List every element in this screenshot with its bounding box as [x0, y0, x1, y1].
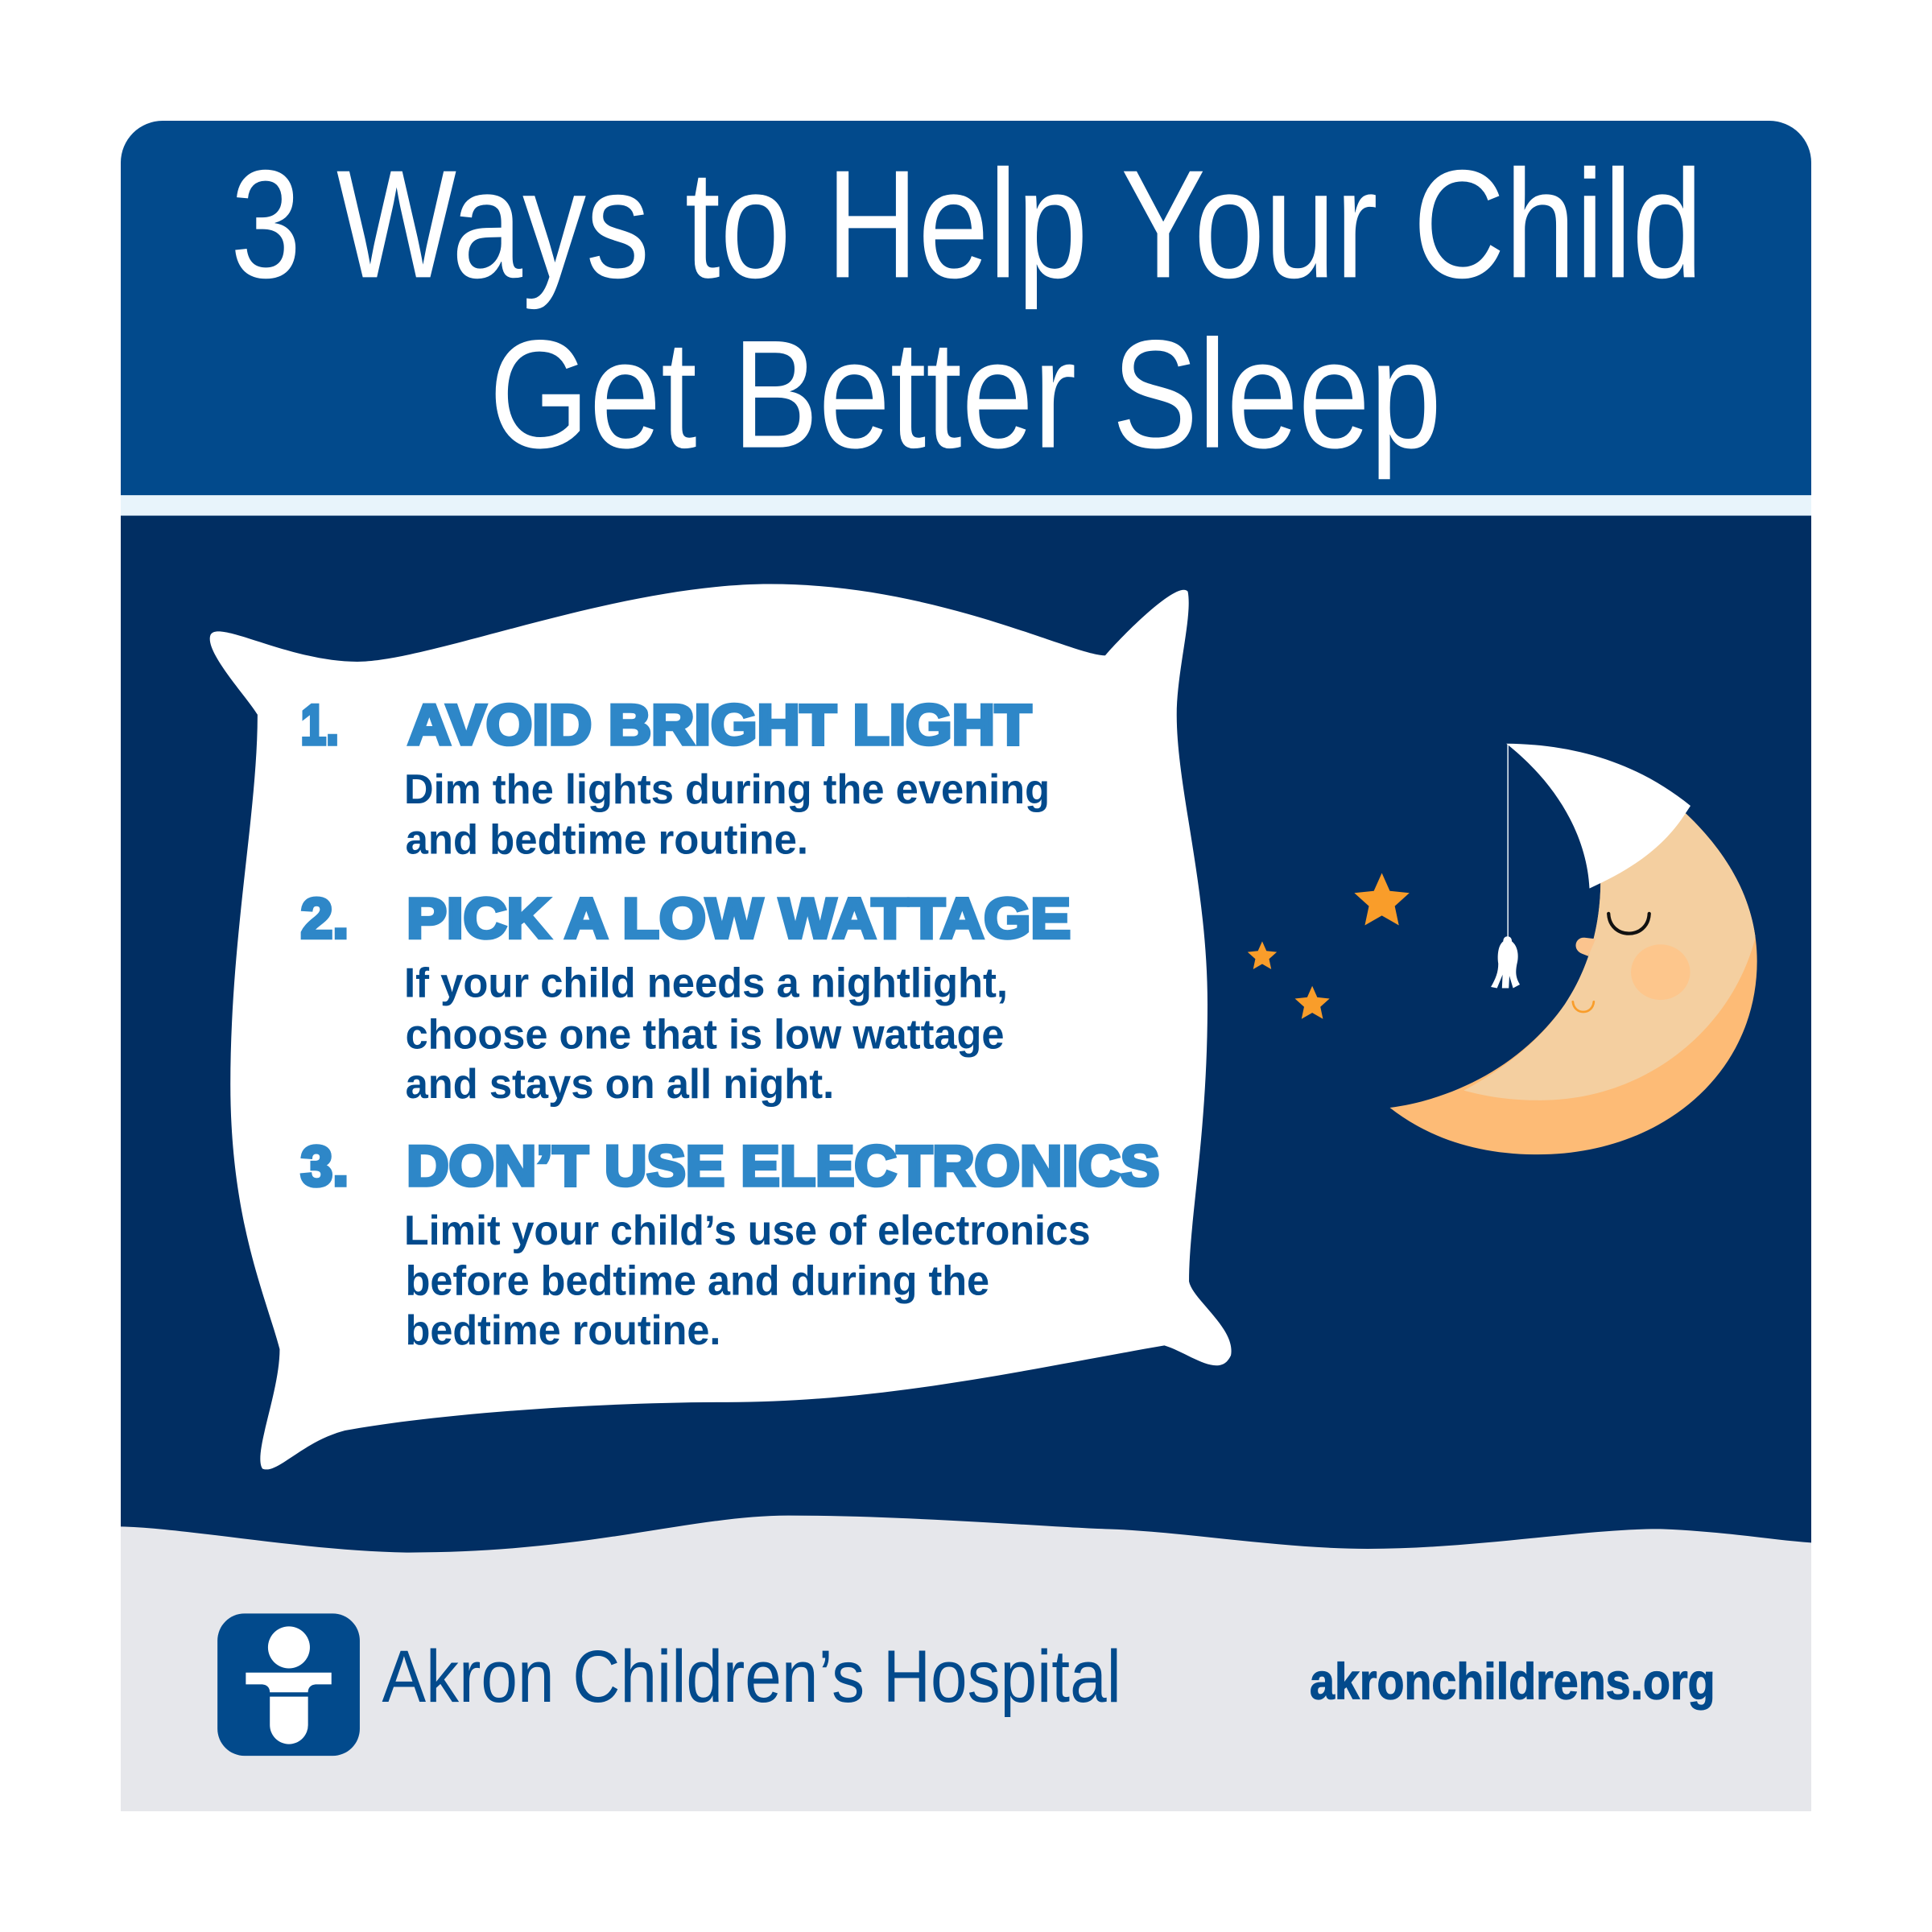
- mouth: [1573, 1001, 1594, 1012]
- tip 3: before bedtime and during the: [406, 1258, 989, 1305]
- tip 3: bedtime routine.: [406, 1307, 720, 1354]
- tip 3: DON’T USE ELECTRONICS: [407, 1133, 1159, 1197]
- tip 2: PICK A LOW WATTAGE: [407, 886, 1071, 950]
- tip 1: Dim the lights during the evening: [404, 766, 1050, 813]
- nose: [1576, 938, 1596, 956]
- website: akronchildrens.org: [1310, 1654, 1715, 1711]
- tip 2: choose one that is low wattage: [406, 1012, 1004, 1059]
- cap tassel: [1491, 936, 1520, 989]
- panel: night sky: [121, 515, 1811, 1563]
- closed eye: [1608, 914, 1649, 934]
- tip 3: Limit your child’s use of electronics: [404, 1208, 1091, 1254]
- title: Get Better Sleep: [489, 308, 1442, 481]
- tip 1: and bedtime routine.: [406, 817, 808, 864]
- icon: sleeping moon: [1390, 744, 1774, 1154]
- tip 2: and stays on all night.: [406, 1061, 834, 1108]
- tip 2: If your child needs a nightlight,: [404, 960, 1008, 1006]
- tip 2: 2.: [300, 886, 349, 950]
- icon: hospital logo: [217, 1613, 360, 1756]
- panel: title banner: [121, 121, 1811, 516]
- title: [230, 138, 1703, 481]
- tip 3: [300, 1133, 1159, 1354]
- tip 1: 1.: [300, 692, 339, 756]
- icon: stars: [1248, 873, 1410, 1019]
- nightcap: [1506, 744, 1690, 889]
- panel: pillow with tips: [210, 584, 1232, 1469]
- tip 1: [300, 692, 1050, 864]
- tip 1: AVOID BRIGHT LIGHT: [408, 692, 1031, 756]
- panel: footer wave: [121, 1516, 1811, 1811]
- tip 2: [300, 886, 1071, 1108]
- tip 3: 3.: [300, 1133, 349, 1197]
- hospital name: Akron Children’s Hospital: [382, 1636, 1121, 1718]
- cap string: [1507, 744, 1509, 939]
- cheek: [1631, 944, 1690, 1000]
